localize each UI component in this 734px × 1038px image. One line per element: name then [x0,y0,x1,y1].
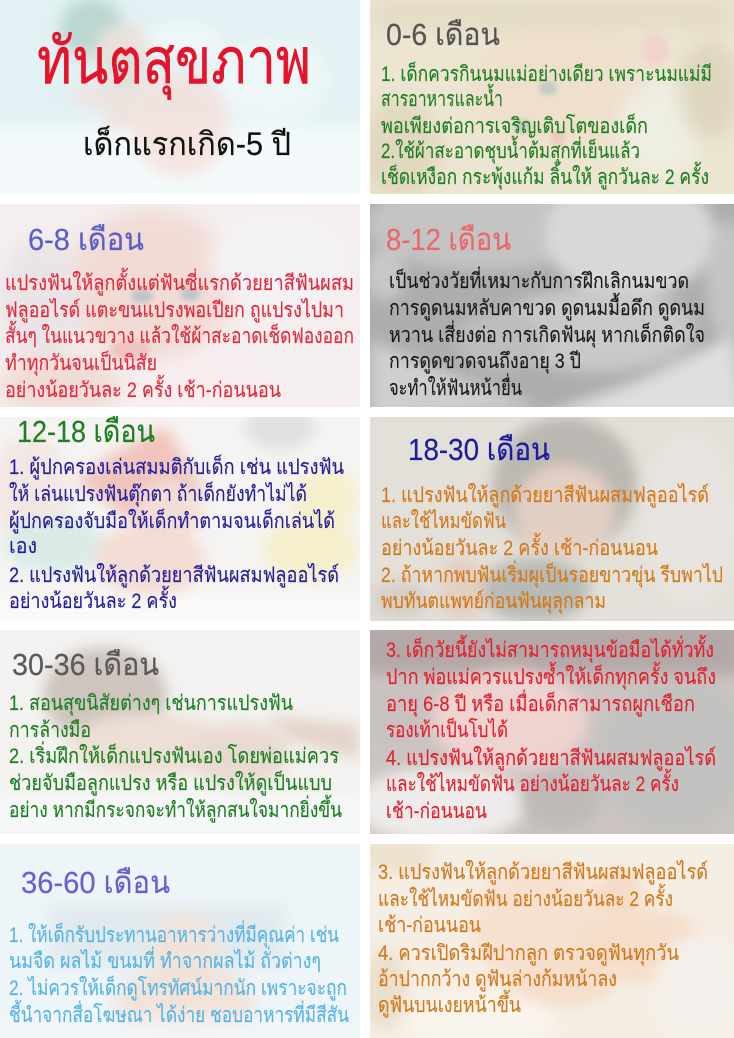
body text: พอเพียงต่อการเจริญเติบโตของเด็ก [381,112,648,138]
panel: 0-6 months [360,0,734,200]
body text: อย่าง หากมีกระจกจะทำให้ลูกสนใจมากยิ่งขึ้น [9,795,342,823]
body text: อย่างน้อยวันละ 2 ครั้ง [9,586,177,613]
body text: พบทันตแพทย์ก่อนฟันผุลุกลาม [381,589,606,614]
body text: เอง [9,535,37,558]
body text: เช้า-ก่อนนอน [386,800,487,823]
photo: baby on fur blanket [360,0,734,200]
body text: จะทำให้ฟันหน้ายื่น [389,373,522,400]
heading: 6-8 เดือน [28,222,144,257]
photo: baby sleeping on knit blanket [370,630,734,834]
body text [9,920,349,1027]
panel: 8-12 months [370,204,734,407]
body text: การดูดขวดจนถึงอายุ 3 ปี [389,350,581,374]
body text [389,266,705,400]
body text [378,860,708,1018]
panel: 6-8 months [0,204,360,415]
photo: sleeping baby and parent's hand [0,630,370,845]
body text: 2. แปรงฟันให้ลูกด้วยยาสีฟันผสมฟลูออไรด์ [9,563,339,588]
body text: สั้นๆ ในแนวขวาง แล้วใช้ผ้าสะอาดเช็ดฟองออก [5,321,354,348]
panel: title [0,0,360,194]
body text: 1. สอนสุขนิสัยต่างๆ เช่นการแปรงฟัน [9,692,293,716]
heading: 18-30 เดือน [408,432,550,467]
body text [386,635,716,823]
panel: 36-60 months [0,844,360,1038]
heading: 8-12 เดือน [386,222,511,257]
panel: 36-60 months continued [355,837,734,1038]
body text: อายุ 6-8 ปี หรือ เมื่อเด็กสามารถผูกเชือก [386,689,695,717]
body text: ให้ เล่นแปรงฟันตุ๊กตา ถ้าเด็กยังทำไม่ได้ [9,480,307,507]
body text: เช้า-ก่อนนอน [378,914,481,937]
body text: ช่วยจับมือลูกแปรง หรือ แปรงให้ดูเป็นแบบ [9,769,332,796]
photo: baby in pink hat with teddy bear [0,417,360,607]
photo: black and white hands [370,204,734,407]
panel: 30-36 months continued [370,630,734,834]
body text [381,483,723,614]
body text: 1. ผู้ปกครองเล่นสมมติกับเด็ก เช่น แปรงฟัน [9,453,344,480]
body text: ดูฟันบนเงยหน้าขึ้น [378,990,521,1018]
photo: baby sleeping in basket [355,837,734,1038]
photo: sleeping baby, pale teal [0,0,360,194]
heading: 12-18 เดือน [17,414,155,449]
title heading: ทันตสุขภาพ [37,25,311,100]
body text: อ้าปากกว้าง ดูฟันล่างก้มหน้าลง [378,968,617,992]
subtitle: เด็กแรกเกิด-5 ปี [83,125,291,162]
body text: เป็นช่วงวัยที่เหมาะกับการฝึกเลิกนมขวด [389,266,689,293]
body text: 4. ควรเปิดริมฝีปากลูก ตรวจดูฟันทุกวัน [378,942,679,966]
photo: baby in knitted hood [370,417,734,624]
body text: รองเท้าเป็นโบได้ [386,716,508,742]
heading: 0-6 เดือน [386,17,500,52]
panel: 12-18 months [0,416,360,608]
photo: laughing baby in bright room [0,844,360,1038]
body text: 2. ไม่ควรให้เด็กดูโทรทัศน์มากนัก เพราะจะถูก [9,974,347,1001]
panel: 18-30 months [370,417,734,624]
body text [381,60,712,190]
body text [9,453,344,613]
body text: 2.ใช้ผ้าสะอาดชุบน้ำต้มสุกที่เย็นแล้ว [381,136,640,164]
body text: ฟลูออไรด์ แตะขนแปรงพอเปียก ถูแปรงไปมา [5,298,344,323]
body text: ชี้นำจากสื่อโฆษณา ได้ง่าย ชอบอาหารที่มีสีสัน [9,1000,349,1027]
body text: ผู้ปกครองจับมือให้เด็กทำตามจนเด็กเล่นได้ [9,507,335,534]
heading: 30-36 เดือน [12,647,159,682]
body text: และใช้ไหมขัดฟัน [381,509,506,533]
body text: ทำทุกวันจนเป็นนิสัย [5,349,157,376]
body text: แปรงฟันให้ลูกตั้งแต่ฟันซี่แรกด้วยยาสีฟันผสม [5,268,354,296]
panel: 30-36 months [0,630,370,845]
body text [9,692,342,823]
body text: อย่างน้อยวันละ 2 ครั้ง เช้า-ก่อนนอน [381,533,658,560]
body text: และใช้ไหมขัดฟัน อย่างน้อยวันละ 2 ครั้ง [378,884,673,911]
photo: smiling baby [0,204,360,415]
body text: สารอาหารและน้ำ [381,84,503,111]
body text: อย่างน้อยวันละ 2 ครั้ง เช้า-ก่อนนอน [5,375,281,402]
heading: 36-60 เดือน [21,865,170,900]
body text: 2. เริ่มฝึกให้เด็กแปรงฟันเอง โดยพ่อแม่ควร [9,741,339,768]
body text: การล้างมือ [9,719,91,742]
body text: 1. ให้เด็กรับประทานอาหารว่างที่มีคุณค่า เช่น [9,920,339,948]
body text: นมจืด ผลไม้ ขนมที่ ทำจากผลไม้ ถั่วต่างๆ [9,946,321,973]
body text [5,268,354,402]
